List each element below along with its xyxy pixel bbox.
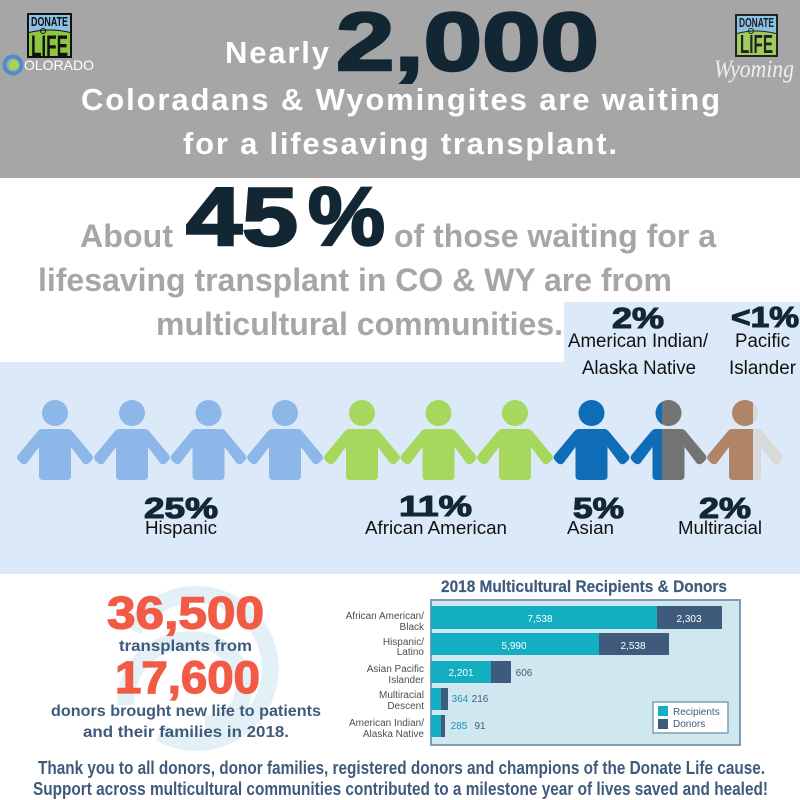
stat: Multiracial <box>678 493 762 538</box>
bar chart: 91 <box>474 721 486 732</box>
logo: Donate Life Wyoming <box>714 14 794 83</box>
logo: Donate Life Colorado: LIFE <box>31 30 68 63</box>
stats: transplants and donors <box>51 588 321 741</box>
stat: American Indian <box>568 303 709 379</box>
stat: Multiracial: 2% <box>699 493 751 525</box>
stat: African American <box>365 491 507 538</box>
bar values: 2,201 <box>448 668 474 679</box>
statement: 45 percent: About <box>80 218 173 254</box>
stat: African American: 11% <box>399 491 472 523</box>
stat: Asian: 5% <box>573 493 624 525</box>
stat: American Indian: American Indian/ <box>568 331 709 352</box>
footer thank you <box>33 758 768 799</box>
logo: Donate Life Colorado: DONATE <box>31 14 68 29</box>
bar chart: 606 <box>516 668 533 679</box>
stat: Hispanic: Hispanic <box>145 518 217 538</box>
category labels: American Indian/ <box>349 718 424 729</box>
stat: Pacific Islander: Pacific <box>735 331 790 352</box>
category labels: Latino <box>397 647 424 658</box>
bar values: 5,990 <box>501 641 527 652</box>
big number: 45%: 45 <box>186 170 298 263</box>
stat: American Indian: 2% <box>612 303 664 335</box>
stat: Hispanic <box>144 493 218 538</box>
bar chart: 216 <box>472 694 489 705</box>
icon: watermark spiral <box>126 594 270 742</box>
bar chart <box>346 600 740 745</box>
bars <box>431 606 657 737</box>
statement text 2: lifesaving transplant in CO & WY are from <box>38 262 672 298</box>
bar values: 2,538 <box>620 641 646 652</box>
category labels: Hispanic/ <box>383 637 424 648</box>
bar values: 7,538 <box>527 614 553 625</box>
statement text 3: multicultural communities. <box>156 306 563 342</box>
bar chart: 285 <box>451 721 468 732</box>
stat: African American: African American <box>365 518 507 538</box>
stats: transplants and donors: 36,500 <box>107 588 264 638</box>
stat: American Indian: Alaska Native <box>582 358 696 379</box>
stat: Pacific Islander: <1% <box>731 302 799 334</box>
statement: 45 percent <box>38 170 716 342</box>
heading line 1: Coloradans & Wyomingites are waiting <box>81 82 720 117</box>
logo: Donate Life Colorado: OLORADO <box>24 57 94 73</box>
legend: Recipients <box>673 707 720 718</box>
header panel <box>0 0 800 178</box>
stats: transplants and donors: and their families in 2018. <box>83 724 289 741</box>
logo: Donate Life Wyoming: LIFE <box>740 29 773 59</box>
bar values: 2,303 <box>676 614 702 625</box>
stat: Pacific Islander <box>729 302 799 379</box>
legend: Donors <box>673 719 705 730</box>
statement text 1: of those waiting for a <box>394 218 716 254</box>
panel: people band <box>0 302 800 574</box>
category labels: African American/ <box>346 611 424 622</box>
category labels: Black <box>400 622 425 633</box>
stat: Asian <box>567 493 624 538</box>
stat: Pacific Islander: Islander <box>729 358 797 379</box>
category labels: Asian Pacific <box>367 664 424 675</box>
stats: transplants and donors: transplants from <box>119 638 252 655</box>
chart title: 2018 Multicultural Recipients & Donors <box>441 577 727 596</box>
logo: Donate Life Wyoming: DONATE <box>739 16 774 30</box>
stat: Asian: Asian <box>567 518 614 538</box>
category labels: Descent <box>387 701 424 712</box>
category labels: Islander <box>388 675 425 686</box>
legend <box>653 702 728 733</box>
category labels: Alaska Native <box>363 729 424 740</box>
stats: transplants and donors: donors brought new life to patients <box>51 703 321 720</box>
stats: transplants and donors: 17,600 <box>115 652 260 703</box>
stat: Hispanic: 25% <box>144 493 218 525</box>
category labels <box>346 611 425 740</box>
bar values <box>448 614 702 679</box>
heading: nearly: Nearly <box>225 35 330 70</box>
heading line 2: for a lifesaving transplant. <box>183 126 617 161</box>
bar chart: 364 <box>452 694 469 705</box>
stat: Multiracial: Multiracial <box>678 518 762 538</box>
big number: 45% <box>186 170 385 263</box>
big number: 45%: % <box>308 170 385 263</box>
icon: row of people holding hands <box>17 400 783 480</box>
logo: Donate Life Colorado <box>4 13 94 74</box>
category labels: Multiracial <box>379 690 424 701</box>
